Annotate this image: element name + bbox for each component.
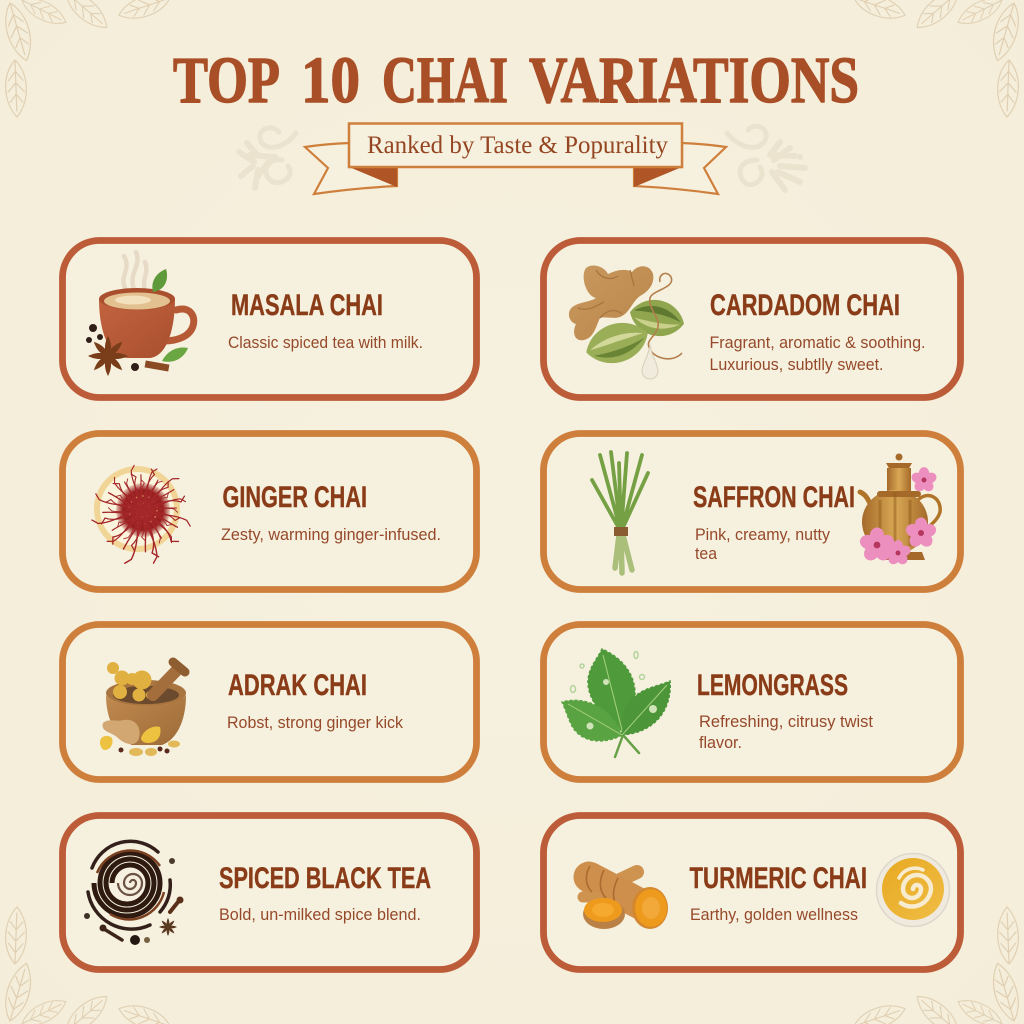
icon: black tea swirl	[84, 841, 184, 945]
title: SAFFRON CHAI	[693, 481, 855, 514]
title: CARDADOM CHAI	[710, 289, 900, 322]
description: Bold, un-milked spice blend.	[219, 906, 421, 924]
title: 10	[301, 44, 360, 117]
panel: saffron chai	[544, 434, 960, 590]
description: Refreshing, citrusy twist	[699, 713, 873, 731]
icon: clay cup with spices	[86, 252, 194, 376]
card frame	[62, 434, 476, 590]
panel: adrak chai	[62, 624, 476, 780]
icon: mortar and pestle	[100, 662, 186, 756]
title: GINGER CHAI	[222, 481, 367, 514]
panel: turmeric chai	[544, 816, 960, 970]
description: Zesty, warming ginger-infused.	[221, 526, 441, 544]
card frame	[62, 624, 476, 780]
card frame	[544, 240, 960, 398]
description: Fragrant, aromatic & soothing.	[710, 334, 926, 352]
ribbon folds	[349, 167, 397, 187]
title	[173, 44, 859, 117]
subtitle: Ranked by Taste & Popurality	[367, 132, 668, 159]
title: TOP	[173, 44, 280, 117]
panel: cardamom chai	[544, 240, 960, 398]
icon: saffron threads	[91, 464, 190, 564]
title: LEMONGRASS	[697, 669, 848, 702]
ribbon tails	[305, 143, 397, 194]
description line 2: flavor.	[699, 734, 742, 752]
panel: lemongrass	[544, 624, 960, 780]
panel: masala chai	[62, 240, 476, 398]
description: Robst, strong ginger kick	[227, 714, 404, 732]
title: ADRAK CHAI	[228, 669, 367, 702]
title: CHAI	[382, 44, 508, 117]
card frame	[544, 624, 960, 780]
description: Pink, creamy, nutty	[695, 526, 831, 544]
ornament: right flourish	[727, 126, 805, 190]
icon: green leaves	[562, 649, 670, 757]
card frame	[62, 816, 476, 970]
title: VARIATIONS	[529, 44, 859, 117]
card frame	[544, 434, 960, 590]
icon: turmeric root	[583, 866, 668, 929]
panel: spiced black tea	[62, 816, 476, 970]
card frame	[62, 240, 476, 398]
title: MASALA CHAI	[231, 289, 383, 322]
ribbon banner	[305, 124, 726, 194]
ribbon box	[349, 124, 682, 167]
panel: ginger chai	[62, 434, 476, 590]
icon: golden milk bowl	[876, 854, 950, 926]
title: SPICED BLACK TEA	[219, 862, 431, 895]
description line 2: Luxurious, subtlly sweet.	[710, 356, 884, 374]
description: Classic spiced tea with milk.	[228, 334, 423, 352]
icon: brass teapot with pink flowers	[858, 454, 940, 566]
icon: lemongrass bundle	[592, 452, 648, 573]
description: Earthy, golden wellness	[690, 906, 858, 924]
card frame	[544, 816, 960, 970]
title: TURMERIC CHAI	[690, 862, 867, 895]
description line 2: tea	[695, 545, 718, 563]
ornament: left flourish	[239, 128, 296, 188]
icon: ginger and cardamom	[569, 266, 688, 379]
